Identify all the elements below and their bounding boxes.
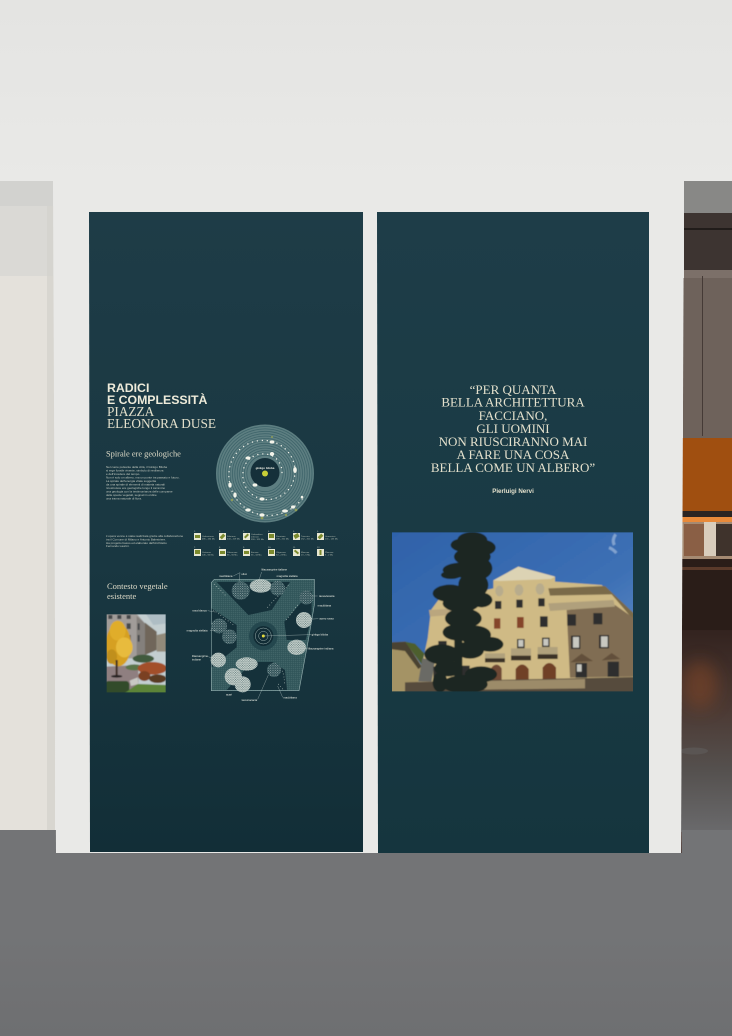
legend: twelve geological eras: 359 - 323 Ma [251,539,265,541]
legend: twelve geological eras: Miocene [301,552,310,554]
photo tree [424,532,503,694]
legend: twelve geological eras: 2. [219,531,221,533]
legend: twelve geological eras: Cretaceo [202,551,212,554]
planting beds [212,582,312,690]
plan labels: liliacsangrine italiane [261,568,287,572]
legend: twelve geological eras: Carbonifero [251,533,263,536]
legend: twelve geological eras: Giurassico [325,535,336,538]
legend: twelve geological eras: 4. [268,531,270,533]
text block: credits: Fernando Laurini. [106,544,130,548]
legend: twelve geological eras: 9. [243,547,245,549]
plan labels: maclótiana [318,603,332,607]
central ginkgo circle [249,622,278,650]
legend: twelve geological eras: 299 - 252 Ma [276,538,290,540]
photo: palazzo and tree [390,530,635,694]
legend: twelve geological eras: 5. [293,531,295,533]
legend: twelve geological eras: 444 - 419 Ma [227,538,241,540]
heading: contesto vegetale esistente: Contesto vegetale [107,581,168,591]
plan labels: magnolia stellata [187,628,208,632]
legend: twelve geological eras: 145 - 66 Ma [202,554,214,556]
gallery floor [0,830,732,1036]
legend: twelve geological eras: Siluriano [227,535,236,538]
text block: credits: tra il Comune di Milano e Antonio Balestriere. [106,537,166,541]
legend: twelve geological eras: Paleocene [227,552,238,554]
legend: twelve geological eras: inferiore [251,536,260,538]
plan labels: maclótiana [219,574,233,578]
title: ELEONORA DUSE [107,416,216,431]
legend: twelve geological eras: 201 - 145 Ma [325,538,339,540]
plan labels: rosa blanca [192,609,207,613]
legend: twelve geological eras: Pliocene [325,552,334,554]
panel: right, quote and photo [377,212,649,853]
heading: spirale ere geologiche: Spirale ere geologiche [106,450,181,458]
heading: contesto vegetale esistente: esistente [107,591,136,601]
plan labels: taxus/acacia [242,698,258,702]
title: E COMPLESSITÀ [107,392,208,407]
legend: twelve geological eras [194,531,339,556]
left doorway recess [0,180,55,830]
legend: twelve geological eras: 56 - 34 Ma [251,554,262,556]
legend: twelve geological eras: 7. [194,547,196,549]
quote: BELLA ARCHITETTURA [441,394,585,410]
spiral species dots [229,440,305,516]
legend: twelve geological eras: Permiano [276,535,286,538]
plan base with paths [211,579,314,691]
plan labels: indiane [192,657,201,661]
text block: spiral description: Nel cuore pulsante della città, il Ginkgo Biloba [106,465,167,469]
diagram: plaza planting plan [187,568,335,702]
text block: spiral description: si erge fossile vivente, simbolo di resilienza [106,468,164,472]
plan labels: maclótiana [283,695,297,699]
legend: twelve geological eras: 12. [317,547,320,549]
quote attribution: Pierluigi Nervi [492,488,534,495]
text block: spiral description [106,465,180,500]
quote: NON RIUSCIRANNO MAI [439,434,587,449]
plan labels: ginkgo biloba [312,632,329,636]
legend: twelve geological eras: 66 - 56 Ma [227,554,238,556]
text block: spiral description: e dell'incedere del tempo. [106,472,140,476]
legend: twelve geological eras: 6. [317,531,319,533]
legend: twelve geological eras: Oligocene [276,552,287,554]
title [107,381,216,431]
plan labels [187,568,335,702]
title: RADICI [107,381,149,395]
quote: “PER QUANTA [470,382,557,397]
quote: GLI UOMINI [476,421,550,436]
legend: twelve geological eras: 23 - 5 Ma [301,554,311,556]
text block: credits [106,534,183,548]
legend: twelve geological eras: 1. [194,531,196,533]
legend: twelve geological eras: Triassico [301,535,310,538]
wall pier [53,180,684,853]
text block: spiral description: delle specie vegetali, segnati in ordine [106,493,157,497]
plan labels: liliacsangrine indiana [308,646,334,650]
legend: twelve geological eras: 34 - 23 Ma [276,554,287,556]
plan labels: taxus/acacia [319,594,335,598]
legend: twelve geological eras: Ordoviciano [202,535,214,538]
quote: A FARE UNA COSA [457,447,570,462]
quote [431,382,595,475]
legend: twelve geological eras: 8. [219,547,221,549]
ginkgo centre marker [262,470,268,476]
text block: credits: Ha progetto basso ed elaborato dall'Architetto [106,541,167,545]
chart: geological era spiral [216,424,314,522]
right doorway with gallery beyond [680,180,732,860]
label: ginkgo biloba: ginkgo biloba [256,466,275,470]
legend: twelve geological eras: 10. [268,547,271,549]
text block: credits: L'opera venne è stata realizzata grazie alla collaborazione [106,534,183,538]
text block: spiral description: una trama naturale di flora. [106,496,142,500]
legend: twelve geological eras: 11. [293,547,296,549]
title: PIAZZA [107,404,155,419]
text block: spiral description: Non è solo un albero, ma un ponte tra passato e futuro. [106,476,180,480]
plan labels: liliacsangrine [192,654,209,658]
text block: spiral description: La spirale dell'energia vitale suggerita [106,479,156,483]
plan labels: acero rosso [319,617,334,621]
legend: twelve geological eras: 485 - 444 Ma [202,538,216,540]
panel: left, plaza information [89,212,363,852]
plan labels: ulivo [241,572,248,576]
text block: spiral description: da una spirale di elementi di materia naturali [106,482,165,486]
legend: twelve geological eras: 252 - 201 Ma [301,538,315,540]
legend: twelve geological eras: Eocene [251,552,259,554]
plan labels: magnolia stellata [277,574,298,578]
quote: BELLA COME UN ALBERO” [431,460,595,475]
quote: FACCIANO, [479,408,547,423]
planting bed lines [213,584,298,690]
legend: twelve geological eras: 5 - 2 Ma [325,554,334,556]
plan labels: acari [226,692,232,696]
plan leader lines [208,572,318,699]
heading: contesto vegetale esistente [107,581,168,601]
trees [211,579,313,692]
text block: spiral description: ricostruisce ere geologiche lungo il cammino [106,486,165,490]
text block: spiral description: una geologia con la testimonianza delle comparse [106,490,173,494]
legend: twelve geological eras: 3. [243,531,245,533]
photo: plaza with yellow ginkgo [105,613,167,696]
